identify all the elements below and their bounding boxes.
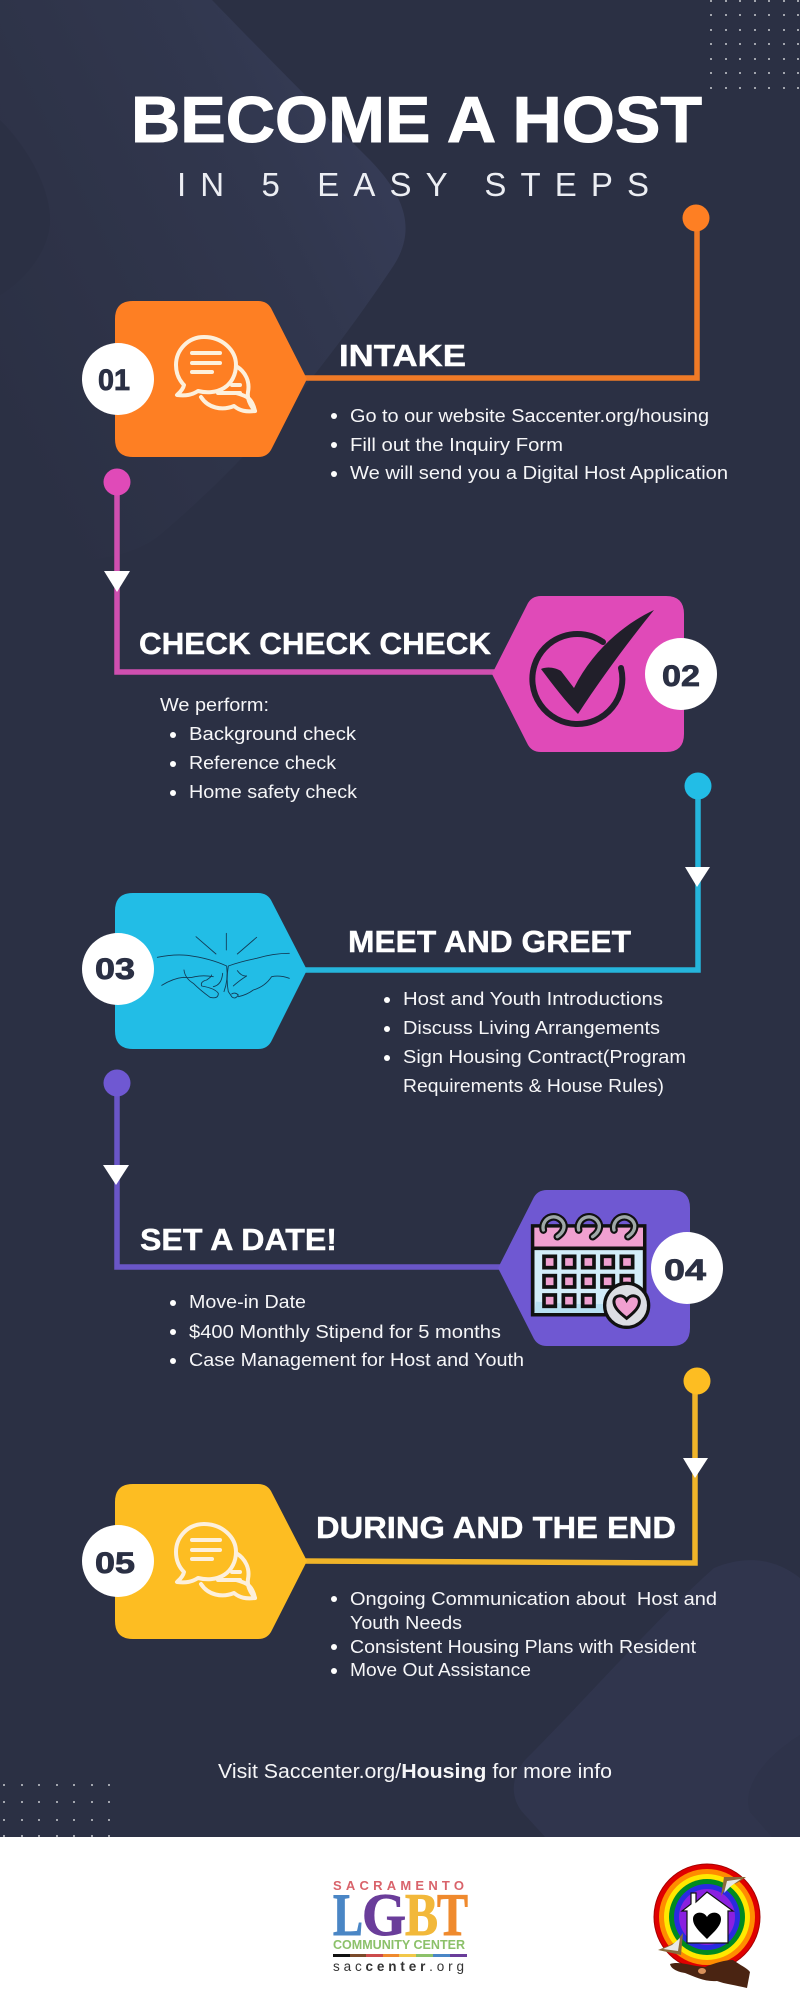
bullet list: meet and greet: Host and Youth Introductions	[403, 989, 663, 1009]
hand	[670, 1960, 750, 1988]
panel: orange hexagon	[115, 301, 307, 457]
logo: Sacramento LGBT Community Center: L	[333, 1882, 363, 1948]
bullet list: checks: Background check	[189, 724, 357, 744]
heading: set a date: SET A DATE!	[140, 1222, 337, 1257]
bullet list: meet and greet: Requirements & House Rules)	[403, 1076, 664, 1096]
bullet list: intake	[331, 406, 728, 483]
logo: Sacramento LGBT Community Center: T	[437, 1882, 468, 1948]
heading: meet and greet: MEET AND GREET	[348, 924, 631, 959]
number badge 02	[645, 638, 717, 710]
connector line: cyan	[300, 772, 712, 970]
step 2: check check check	[104, 468, 717, 802]
title: BECOME A HOST	[131, 83, 702, 156]
logo: Sacramento LGBT Community Center	[333, 1878, 468, 1974]
bullet list: during and the end: Move Out Assistance	[350, 1660, 531, 1680]
bullet list: set a date: Case Management for Host and Youth	[189, 1350, 524, 1370]
bullet list: during and the end: Ongoing Communication about Host and	[350, 1589, 717, 1609]
panel: yellow hexagon	[115, 1484, 307, 1639]
bullet list: during and the end: Consistent Housing Plans with Resident	[350, 1637, 696, 1657]
arrow: yellow line	[683, 1458, 708, 1478]
logo: Sacramento LGBT Community Center: G	[362, 1882, 406, 1948]
bullet list: checks: Home safety check	[189, 782, 358, 802]
background blob: top left	[0, 0, 406, 566]
panel: pink hexagon	[492, 596, 684, 752]
subtitle: IN 5 EASY STEPS	[177, 166, 649, 203]
bullet list: meet and greet	[384, 989, 686, 1096]
bullet list: set a date: Move-in Date	[189, 1292, 306, 1312]
background blob: left dark	[0, 120, 50, 295]
number badge 03	[82, 933, 154, 1005]
number badge 05: 05	[95, 1547, 135, 1580]
bullet list: during and the end	[331, 1589, 717, 1680]
step 3: meet and greet	[82, 772, 712, 1096]
icon: fist bump	[157, 933, 289, 998]
heading: during and the end: DURING AND THE END	[316, 1510, 676, 1545]
bullet list: intake: Go to our website Saccenter.org/housing	[350, 406, 709, 426]
connector line: purple	[104, 1070, 505, 1267]
logo: Sacramento LGBT Community Center: B	[405, 1882, 438, 1948]
footer band	[0, 1837, 800, 2000]
icon: calendar with heart	[533, 1217, 649, 1327]
background blob: bottom right	[514, 1560, 800, 1837]
panel: cyan hexagon	[115, 893, 307, 1049]
number badge 03: 03	[95, 953, 135, 986]
step 5: during and the end	[82, 1368, 717, 1680]
background blob: bottom right dark	[748, 1735, 800, 1837]
step 4: set a date	[103, 1070, 723, 1370]
bullet list: meet and greet: Sign Housing Contract(Program	[403, 1047, 686, 1067]
bullet list: intake: Fill out the Inquiry Form	[350, 435, 563, 455]
icon: chat bubbles	[176, 1524, 255, 1598]
arrows	[658, 1877, 746, 1955]
number badge 02: 02	[662, 660, 700, 693]
bullet list: set a date: $400 Monthly Stipend for 5 months	[189, 1322, 501, 1342]
number badge 01: 01	[98, 364, 130, 397]
house with heart	[682, 1892, 733, 1943]
bullet list: checks: We perform:	[160, 695, 269, 715]
call to action text: Visit Saccenter.org/ Housing for more info	[218, 1761, 612, 1783]
logo: Sacramento LGBT Community Center: SACRAMENTO	[333, 1878, 464, 1893]
bullet list: meet and greet: Discuss Living Arrangements	[403, 1018, 660, 1038]
bullet list: set a date	[170, 1292, 524, 1370]
bullet list: intake: We will send you a Digital Host Application	[350, 463, 728, 483]
logo: Sacramento LGBT Community Center: sac center .org	[333, 1959, 464, 1974]
number badge 01	[82, 343, 154, 415]
logo: Sacramento LGBT Community Center: COMMUNITY CENTER	[333, 1937, 466, 1952]
connector line: yellow	[300, 1368, 710, 1563]
heading: intake: INTAKE	[339, 338, 466, 373]
icon: chat bubbles	[176, 337, 255, 411]
heading: check check check: CHECK CHECK CHECK	[139, 626, 492, 661]
bullet list: checks	[160, 695, 358, 802]
connector line: pink	[104, 468, 500, 672]
number badge 05	[82, 1525, 154, 1597]
connector line: orange	[300, 204, 710, 378]
arrow: purple line	[103, 1165, 129, 1185]
dot pattern: top right	[710, 0, 799, 89]
number badge 04: 04	[664, 1254, 706, 1287]
rainbow rings	[654, 1864, 760, 1970]
arrow: cyan line	[685, 867, 710, 887]
number badge 04	[651, 1232, 723, 1304]
dot pattern: bottom left	[3, 1784, 110, 1837]
bullet list: during and the end: Youth Needs	[350, 1613, 462, 1633]
panel: purple hexagon	[498, 1190, 690, 1346]
bullet list: checks: Reference check	[189, 753, 337, 773]
step 1: intake	[82, 204, 728, 483]
icon: check mark in circle	[532, 610, 654, 724]
logo: rainbow house in hand	[654, 1864, 760, 1988]
arrow: pink line	[104, 571, 130, 592]
